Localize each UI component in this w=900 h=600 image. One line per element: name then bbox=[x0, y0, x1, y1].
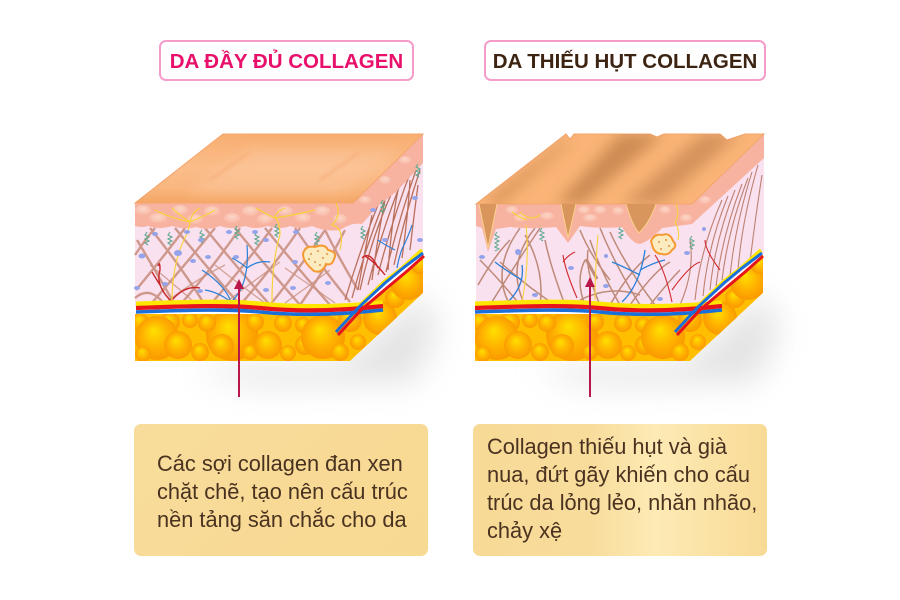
text box: right: Collagen thiếu hụt và già bbox=[487, 434, 727, 459]
text box: right: chảy xệ bbox=[487, 518, 562, 543]
heading: collagen deficiency bbox=[484, 40, 766, 81]
green squiggles bbox=[145, 164, 420, 245]
heading: full collagen: DA ĐẦY ĐỦ COLLAGEN bbox=[170, 50, 403, 73]
epidermis cells bbox=[135, 156, 411, 224]
heading: collagen deficiency: DA THIẾU HỤT COLLAGEN bbox=[493, 50, 757, 73]
sebaceous gland bbox=[303, 246, 335, 272]
left skin block bbox=[131, 134, 429, 362]
shadow: right block bbox=[530, 293, 780, 385]
text box: left bbox=[134, 424, 428, 556]
epidermis layer bbox=[476, 133, 764, 252]
skin diagrams bbox=[134, 133, 783, 397]
text box: right bbox=[473, 424, 767, 556]
top skin surface bbox=[135, 134, 423, 203]
fat layer bbox=[471, 252, 769, 362]
blue fibroblast cells bbox=[134, 196, 423, 293]
dermis layer bbox=[476, 155, 764, 306]
epidermis layer bbox=[135, 134, 423, 230]
text box: left: chặt chẽ, tạo nên cấu trúc bbox=[157, 479, 408, 504]
top surface highlights bbox=[185, 150, 400, 193]
shadow: left block bbox=[190, 293, 438, 385]
top skin surface bbox=[476, 134, 764, 204]
arrow: left bbox=[234, 279, 244, 397]
blue fibroblast cells bbox=[479, 227, 706, 301]
collagen fibers fine bbox=[150, 262, 335, 303]
fat layer bbox=[131, 252, 429, 362]
text box: left: Các sợi collagen đan xen bbox=[157, 451, 403, 476]
text box: right: trúc da lỏng lẻo, nhăn nhão, bbox=[487, 490, 757, 515]
dermis layer bbox=[135, 160, 423, 306]
right skin block bbox=[471, 133, 769, 362]
blue capillaries bbox=[202, 225, 412, 302]
skin folds bbox=[484, 134, 740, 204]
heading: full collagen bbox=[159, 40, 414, 81]
collagen fibers sparse bbox=[478, 228, 680, 305]
red capillaries bbox=[152, 256, 385, 301]
wrinkle folds bbox=[479, 204, 656, 248]
broken collagen fiber bbox=[586, 259, 597, 279]
green squiggles bbox=[495, 226, 694, 251]
text box: right: nua, đứt gãy khiến cho cấu bbox=[487, 462, 750, 487]
blood vessels bbox=[475, 250, 763, 335]
blood vessels bbox=[136, 250, 424, 335]
blue capillaries bbox=[495, 250, 665, 302]
epidermis cells bbox=[506, 196, 711, 222]
yellow nerves bbox=[155, 203, 341, 302]
collagen fibers side bbox=[345, 168, 420, 300]
collagen fibers dense bbox=[135, 228, 358, 305]
red capillaries bbox=[563, 240, 720, 302]
collagen fibers side bbox=[680, 165, 762, 305]
yellow nerves bbox=[512, 204, 679, 302]
text box: left: nền tảng săn chắc cho da bbox=[157, 507, 407, 532]
arrow: right bbox=[585, 277, 595, 397]
sebaceous gland bbox=[651, 234, 675, 254]
